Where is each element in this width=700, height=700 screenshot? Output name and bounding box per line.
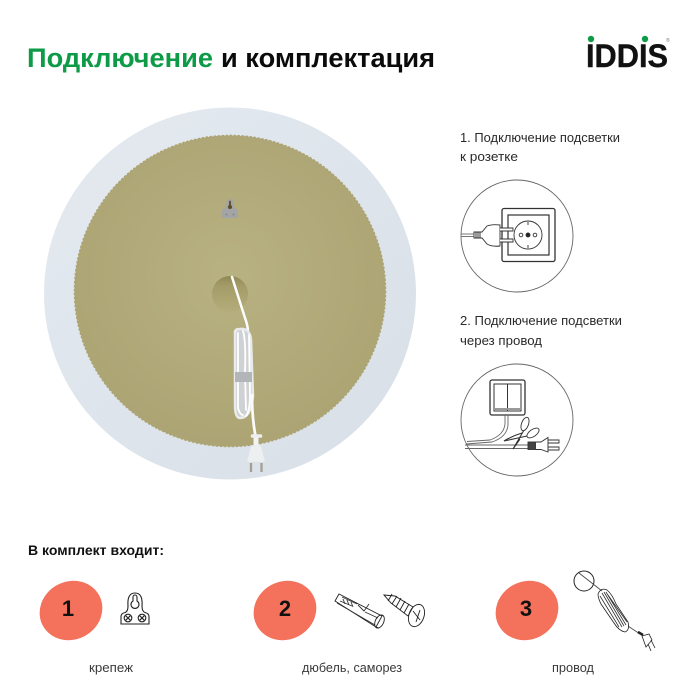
logo: IDDIS: IDDIS: [586, 38, 668, 74]
label: dowel, screw: дюбель, саморез: [302, 661, 402, 675]
step 2 text: через провод: [460, 334, 543, 348]
icon: plug into socket: [461, 180, 573, 292]
title: [27, 43, 435, 73]
kit item 1: mounting bracket: [29, 570, 149, 675]
gold backing disc: [74, 136, 386, 446]
mirror illuminated rim: [44, 108, 416, 480]
number badge 2: [243, 570, 327, 651]
label: cord: провод: [552, 661, 595, 675]
title: и комплектация: [221, 43, 435, 73]
icon: screw: [384, 594, 427, 629]
icon: bracket: [121, 593, 149, 624]
step 1 text: [460, 131, 620, 164]
number badge 3: 3: [520, 596, 532, 621]
step 1 text: 1. Подключение подсветки: [460, 131, 620, 145]
kit item 2: dowel and screw: [243, 570, 427, 675]
title: Подключение: [27, 43, 213, 73]
icon: coiled cord with plug: [574, 571, 655, 651]
label: fastener: крепеж: [89, 661, 134, 675]
number badge 2: 2: [279, 596, 291, 621]
number badge 1: 1: [62, 596, 74, 621]
mirror back view: [44, 108, 416, 480]
step 2 text: [460, 314, 622, 348]
cable hole: [212, 276, 248, 312]
wall mount bracket: [222, 199, 238, 218]
icon: switch and wire cutting: [461, 364, 573, 476]
step 1 text: к розетке: [460, 150, 518, 164]
kit item 3: cord: [485, 570, 655, 675]
white cord with plug: [232, 277, 264, 472]
logo: IDDIS: ®: [666, 37, 670, 44]
icon: dowel: [335, 594, 386, 630]
step 2 text: 2. Подключение подсветки: [460, 314, 622, 328]
kit heading: В комплект входит:: [28, 543, 164, 558]
number badge 3: [485, 570, 569, 651]
